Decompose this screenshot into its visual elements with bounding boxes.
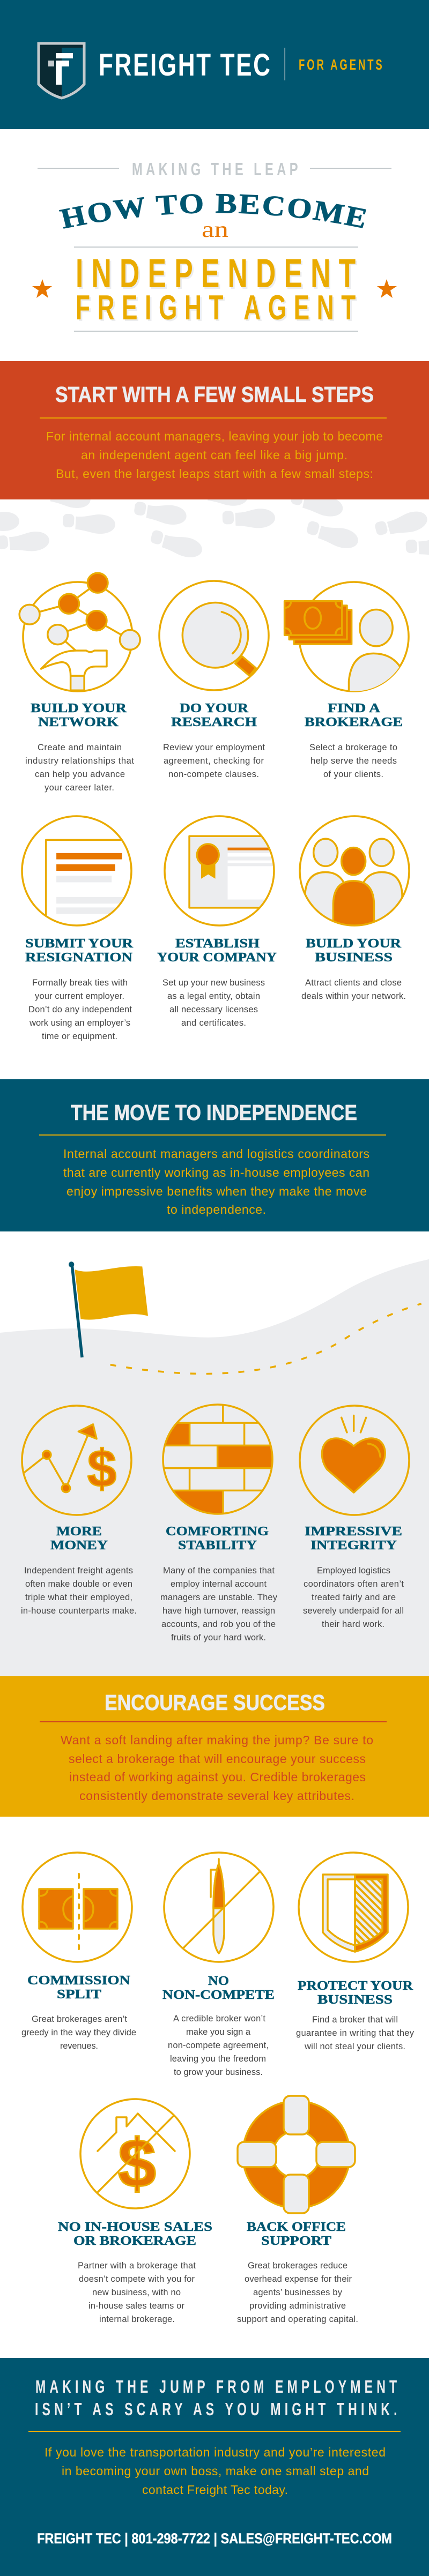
attribute description: will not steal your clients. (304, 2042, 405, 2051)
title: freight agent: FREIGHT AGENT (76, 288, 356, 327)
step description: deals within your network. (301, 991, 406, 1001)
panel: the move to independence (0, 1079, 429, 1231)
step heading (305, 701, 403, 729)
title block (32, 160, 397, 332)
section intro: But, even the largest leaps start with a few small steps: (56, 467, 373, 481)
attribute description (296, 2015, 415, 2051)
step heading: BUILD YOUR (31, 701, 127, 715)
benefit description: employ internal account (171, 1579, 267, 1589)
step description: as a legal entity, obtain (167, 991, 260, 1001)
icon: rising chart and dollar: $ (87, 1439, 116, 1498)
benefit description: accounts, and rob you of the (161, 1619, 276, 1629)
closing text: contact Freight Tec today. (142, 2483, 288, 2497)
step description: and certificates. (181, 1018, 246, 1028)
panel: encourage success (0, 1676, 429, 1817)
icon: team of people (300, 816, 409, 927)
benefit heading (50, 1525, 108, 1552)
step: establish your company (157, 815, 277, 1026)
attribute description: in-house sales teams or (88, 2301, 184, 2311)
attribute heading: BACK OFFICE (247, 2220, 346, 2234)
section intro (46, 429, 383, 481)
section intro: Internal account managers and logistics coordinators (63, 1147, 369, 1161)
section intro: For internal account managers, leaving your job to become (46, 429, 383, 443)
eyebrow heading: MAKING THE LEAP (132, 160, 298, 180)
panel: closing call to action (0, 2358, 429, 2576)
icon: document (21, 815, 132, 927)
attribute description: non-compete agreement, (168, 2041, 269, 2050)
section intro: select a brokerage that will encourage your success (69, 1752, 366, 1766)
attribute description: Great brokerages aren’t (32, 2014, 127, 2024)
benefit heading: INTEGRITY (310, 1539, 397, 1552)
attribute description: support and operating capital. (237, 2314, 358, 2324)
attribute description: new business, with no (92, 2288, 181, 2297)
section intro: an independent agent can feel like a big jump. (81, 448, 347, 462)
benefit description (303, 1566, 404, 1629)
attribute heading: COMMISSION (27, 1974, 131, 1988)
step: do your research (159, 581, 269, 779)
benefit description (21, 1566, 137, 1616)
step description: all necessary licenses (169, 1005, 258, 1014)
attribute description: greedy in the way they divide (21, 2028, 136, 2037)
benefit description: often make double or even (25, 1579, 132, 1589)
step description (162, 978, 265, 1028)
benefit: comforting stability (160, 1402, 278, 1642)
step heading (171, 701, 257, 729)
benefit description (160, 1566, 278, 1642)
attribute description (78, 2261, 196, 2324)
benefit heading: MONEY (50, 1539, 108, 1552)
icon: left star (32, 279, 52, 298)
section heading: ENCOURAGE SUCCESS (105, 1690, 325, 1715)
benefit heading: STABILITY (178, 1539, 257, 1552)
step heading: RESIGNATION (25, 951, 133, 965)
attribute heading: NON-COMPETE (162, 1988, 275, 2002)
benefit: impressive integrity (300, 1406, 409, 1629)
step description: Create and maintain (38, 743, 122, 752)
attribute heading (27, 1974, 131, 2002)
step: submit your resignation (21, 815, 134, 1041)
attribute description: doesn’t compete with you for (79, 2274, 195, 2284)
benefit description: their hard work. (322, 1619, 384, 1629)
title: independent (shadow): INDEPENDENT (77, 252, 357, 297)
step description (25, 743, 134, 793)
section intro: that are currently working as in-house employees can (63, 1166, 369, 1179)
step description: Review your employment (163, 743, 265, 752)
step description: Set up your new business (162, 978, 265, 988)
step description: agreement, checking for (164, 756, 264, 766)
attribute: no non-compete (162, 1853, 275, 2077)
header band (0, 0, 429, 129)
step heading: YOUR COMPANY (157, 951, 277, 965)
icon: certificate (164, 815, 275, 927)
attribute heading: BUSINESS (317, 1993, 393, 2007)
benefit heading (166, 1525, 269, 1552)
attribute heading: NO IN-HOUSE SALES (58, 2220, 212, 2234)
step: build your network (19, 573, 140, 793)
step heading: FIND A (328, 701, 381, 715)
icon: split banknote (23, 1853, 132, 1962)
attribute description: to grow your business. (174, 2067, 263, 2077)
title: an: an (202, 218, 228, 242)
step description: industry relationships that (25, 756, 134, 766)
benefit heading (305, 1525, 402, 1552)
step heading: SUBMIT YOUR (25, 937, 134, 951)
step description (28, 978, 132, 1041)
benefit: more money (21, 1406, 137, 1616)
attribute heading (58, 2220, 212, 2248)
attribute description (168, 2014, 269, 2077)
benefit description: treated fairly and are (312, 1593, 396, 1602)
attribute heading: NO (208, 1974, 229, 1988)
attribute heading: PROTECT YOUR (298, 1979, 413, 1993)
attribute description: providing administrative (249, 2301, 346, 2311)
panel: start with a few small steps (0, 361, 429, 499)
benefit description: Many of the companies that (163, 1566, 275, 1576)
title arc: how to become: HOW TO BECOME (59, 194, 366, 229)
step: build your business (300, 816, 409, 1001)
attribute description: revenues. (60, 2041, 98, 2051)
attribute: protect your business (296, 1853, 415, 2051)
step description (309, 743, 397, 779)
step heading: ESTABLISH (175, 937, 260, 951)
icon: shining heart (300, 1406, 409, 1515)
title: freight agent (shadow): FREIGHT AGENT (77, 290, 357, 328)
benefit heading: IMPRESSIVE (305, 1525, 402, 1539)
icon: rising chart and dollar (22, 1406, 131, 1515)
step heading (25, 937, 134, 965)
step heading: BUSINESS (315, 951, 393, 965)
section intro: to independence. (167, 1203, 266, 1216)
section intro: instead of working against you. Credible brokerages (69, 1770, 366, 1784)
step heading: BUILD YOUR (306, 937, 402, 951)
step description (163, 743, 265, 779)
attribute description: Great brokerages reduce (248, 2261, 347, 2271)
step heading (31, 701, 127, 729)
closing heading: MAKING THE JUMP FROM EMPLOYMENT (35, 2377, 397, 2397)
step heading (157, 937, 277, 965)
closing heading: ISN’T AS SCARY AS YOU MIGHT THINK. (35, 2400, 397, 2420)
hillside background with flag and path (0, 1259, 429, 1676)
step description: can help you advance (35, 770, 125, 779)
attribute description: guarantee in writing that they (296, 2028, 415, 2038)
step heading: RESEARCH (171, 715, 257, 729)
step description: your career later. (45, 783, 114, 793)
benefit description: managers are unstable. They (160, 1593, 278, 1602)
step description: Attract clients and close (305, 978, 402, 988)
step heading: NETWORK (38, 715, 119, 729)
step description: your current employer. (35, 991, 124, 1001)
step description: non-compete clauses. (168, 770, 259, 779)
attribute heading (247, 2220, 346, 2248)
benefit description: Independent freight agents (24, 1566, 133, 1576)
icon: house and dollar crossed out (80, 2099, 190, 2208)
attribute heading: SPLIT (57, 1988, 101, 2002)
icon: right star (377, 279, 397, 298)
attribute heading: SUPPORT (261, 2234, 331, 2248)
icon: cash and person (285, 582, 416, 693)
icon: half hatched shield (299, 1853, 408, 1962)
section heading: START WITH A FEW SMALL STEPS (55, 382, 374, 407)
step description: Select a brokerage to (309, 743, 397, 752)
attribute heading (298, 1979, 413, 2007)
icon: magnifying glass (159, 581, 269, 690)
section intro (63, 1147, 369, 1216)
step description: work using an employer’s (29, 1018, 130, 1028)
icon: network and hammer (19, 573, 140, 691)
benefit description: in-house counterparts make. (21, 1606, 137, 1616)
step description: of your clients. (323, 770, 383, 779)
benefit description: fruits of your hard work. (171, 1633, 266, 1642)
icon: house and dollar crossed out: $ (118, 2125, 156, 2202)
attribute: back office support (237, 2096, 358, 2324)
icon: pen crossed out (164, 1853, 273, 1962)
footprints trail (0, 483, 429, 561)
title: independent: INDEPENDENT (76, 250, 356, 296)
attribute heading: OR BROKERAGE (73, 2234, 196, 2248)
attribute description: overhead expense for their (245, 2274, 352, 2284)
attribute description: A credible broker won’t (173, 2014, 265, 2024)
dashed path (110, 1304, 421, 1374)
attribute heading (162, 1974, 275, 2002)
step heading (306, 937, 402, 965)
benefit description: severely underpaid for all (303, 1606, 404, 1616)
closing text: in becoming your own boss, make one small step and (62, 2464, 369, 2478)
attribute description: Partner with a brokerage that (78, 2261, 196, 2271)
icon: brick wall (161, 1402, 273, 1516)
step description: time or equipment. (42, 1032, 117, 1041)
benefit description: Employed logistics (317, 1566, 390, 1576)
benefit description: triple what their employed, (25, 1593, 132, 1602)
attribute description (21, 2014, 136, 2051)
step description: help serve the needs (310, 756, 397, 766)
section intro: consistently demonstrate several key attributes. (79, 1789, 354, 1803)
closing text: If you love the transportation industry and you’re interested (45, 2445, 386, 2459)
logo wordmark: FREIGHT TEC (99, 47, 270, 82)
logo tagline: FOR AGENTS (299, 57, 382, 73)
step description: Formally break ties with (32, 978, 128, 988)
attribute: commission split (21, 1853, 136, 2051)
step heading: BROKERAGE (305, 715, 403, 729)
attribute description: make you sign a (186, 2027, 251, 2037)
attribute description: Find a broker that will (312, 2015, 398, 2025)
section intro: Want a soft landing after making the jump? Be sure to (61, 1733, 373, 1747)
step: find a brokerage (285, 582, 416, 779)
closing heading (35, 2377, 397, 2420)
icon: flag (69, 1261, 148, 1357)
attribute description (237, 2261, 358, 2324)
attribute description: agents’ businesses by (253, 2288, 343, 2297)
step heading: DO YOUR (180, 701, 249, 715)
benefit heading: COMFORTING (166, 1525, 269, 1539)
attribute description: leaving you the freedom (170, 2054, 266, 2064)
attribute description: internal brokerage. (99, 2314, 175, 2324)
benefit description: coordinators often aren’t (304, 1579, 404, 1589)
section intro: enjoy impressive benefits when they make the move (66, 1184, 367, 1198)
step description: Don’t do any independent (28, 1005, 132, 1014)
step description (301, 978, 406, 1001)
icon: life preserver (238, 2096, 355, 2213)
closing text (45, 2445, 386, 2497)
section intro (61, 1733, 373, 1803)
attribute: no in-house sales or brokerage (58, 2099, 212, 2324)
benefit description: have high turnover, reassign (162, 1606, 275, 1616)
benefit heading: MORE (56, 1525, 102, 1539)
icon: Freight Tec shield logo (39, 43, 84, 98)
section heading: THE MOVE TO INDEPENDENCE (71, 1100, 357, 1125)
